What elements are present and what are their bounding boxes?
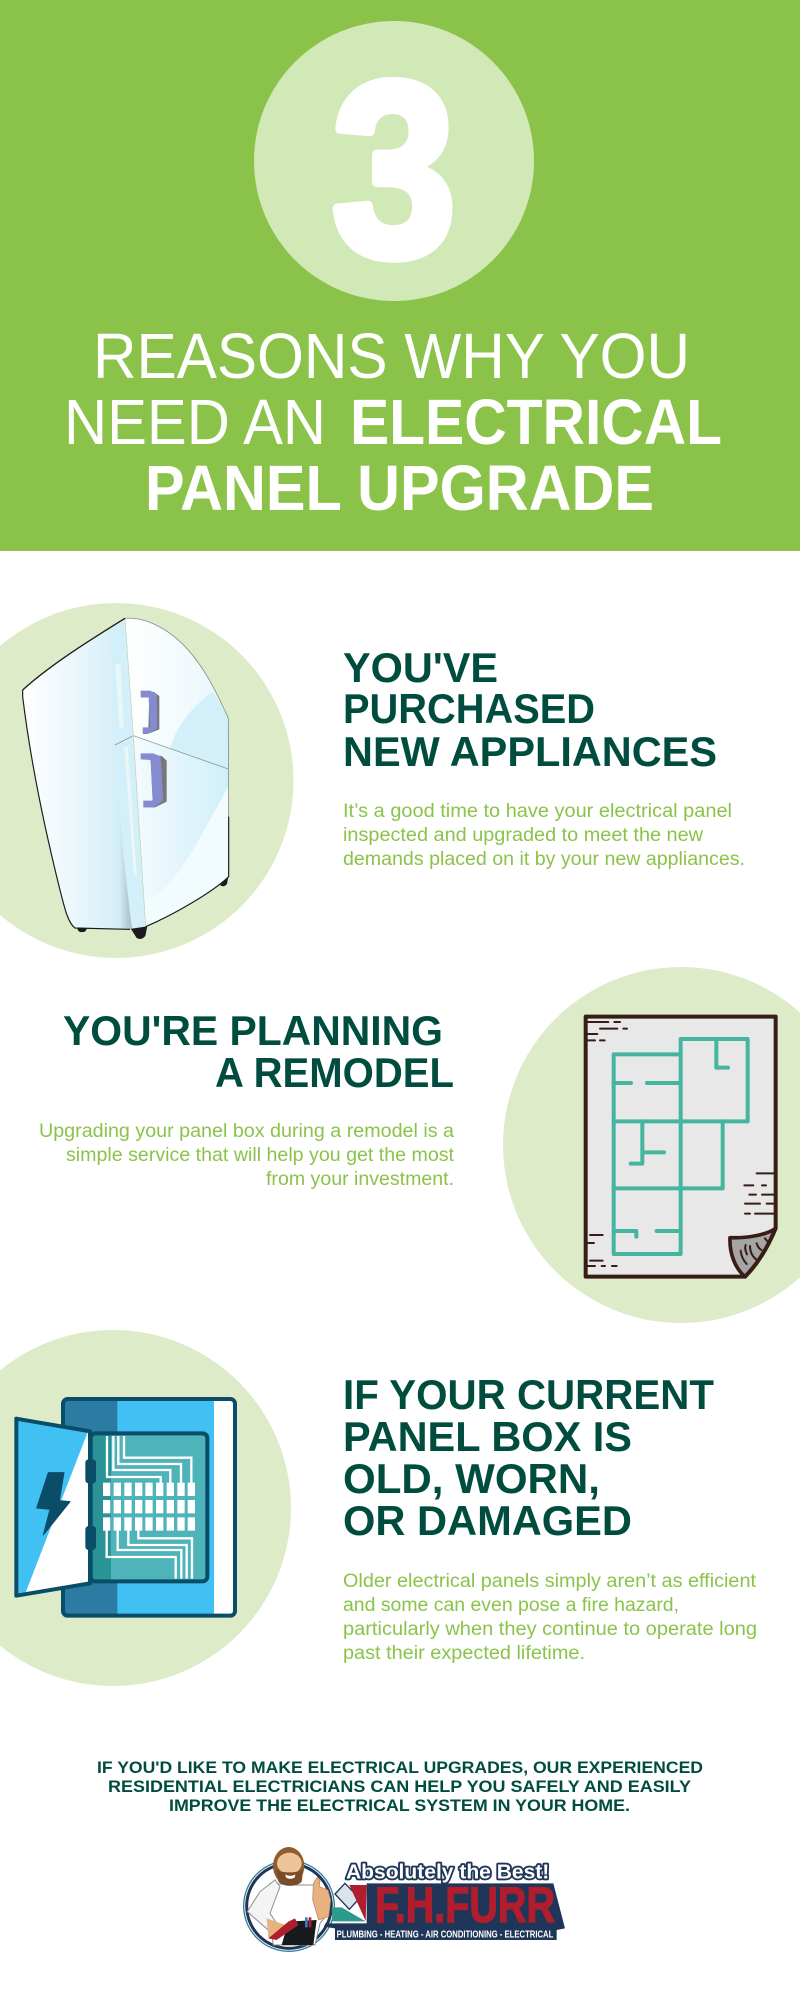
title: [64, 320, 722, 524]
panel: new appliances: [0, 603, 745, 958]
fridge handles: [141, 691, 167, 807]
body text: old worn or damaged: Older electrical panels simply aren’t as efficient: [343, 1571, 757, 1592]
body text: old worn or damaged: particularly when they continue to operate long: [343, 1619, 757, 1640]
icon circle: refrigerator background: [0, 603, 294, 958]
body text: old worn or damaged: [343, 1571, 757, 1664]
heading: purchased new appliances: YOU'VE: [343, 644, 498, 691]
body text: planning a remodel: simple service that will help you get the most: [66, 1145, 455, 1166]
body text: new appliances: inspected and upgraded to meet the new: [343, 825, 703, 846]
body text: old worn or damaged: and some can even pose a fire hazard,: [343, 1595, 679, 1616]
header banner: [0, 0, 800, 551]
heading: purchased new appliances: PURCHASED: [343, 685, 595, 732]
icon: floor plan: [586, 1017, 776, 1277]
heading: old worn or damaged: PANEL BOX IS: [343, 1413, 632, 1460]
panel: old worn or damaged: [0, 1330, 757, 1686]
closing call to action: IF YOU'D LIKE TO MAKE ELECTRICAL UPGRADES, OUR EXPERIENCED: [97, 1758, 703, 1777]
logo tagline top: Absolutely the Best!: [346, 1861, 549, 1884]
number circle: [254, 21, 534, 308]
icon: electrical panel box: [16, 1399, 235, 1616]
breaker compartment: [91, 1433, 207, 1581]
body text: planning a remodel: from your investment.: [266, 1169, 454, 1190]
title: PANEL UPGRADE: [145, 452, 654, 524]
body text: new appliances: demands placed on it by your new appliances.: [343, 849, 745, 870]
title: NEED AN: [64, 386, 326, 458]
body text: new appliances: It’s a good time to have your electrical panel: [343, 801, 732, 822]
icon: refrigerator: [23, 618, 229, 939]
heading: purchased new appliances: [343, 644, 717, 775]
logo company name: F.H.FURR: [375, 1877, 555, 1933]
heading: old worn or damaged: IF YOUR CURRENT: [343, 1371, 714, 1418]
heading: old worn or damaged: [343, 1371, 714, 1544]
heading: planning a remodel: [63, 1007, 454, 1096]
heading: old worn or damaged: OLD, WORN,: [343, 1455, 600, 1502]
icon circle: panel box background: [0, 1330, 291, 1686]
heading: purchased new appliances: NEW APPLIANCES: [343, 728, 717, 775]
heading: planning a remodel: A REMODEL: [215, 1049, 454, 1096]
panel: planning a remodel: [39, 967, 800, 1323]
icon circle: floor plan background: [503, 967, 800, 1323]
logo roof icon: [332, 1883, 367, 1921]
body text: old worn or damaged: past their expected lifetime.: [343, 1643, 585, 1664]
panel door: [16, 1419, 96, 1596]
body text: new appliances: [343, 801, 745, 870]
body text: planning a remodel: [39, 1121, 455, 1190]
heading: old worn or damaged: OR DAMAGED: [343, 1497, 632, 1544]
closing call to action: [97, 1758, 703, 1815]
logo mascot: [244, 1847, 334, 1951]
number circle: 3: [332, 30, 456, 308]
body text: planning a remodel: Upgrading your panel box during a remodel is a: [39, 1121, 454, 1142]
title: REASONS WHY YOU: [93, 320, 690, 392]
logo services strip: PLUMBING - HEATING - AIR CONDITIONING - ELECTRICAL: [337, 1929, 553, 1940]
logo: F.H. Furr: [244, 1847, 565, 1951]
closing call to action: IMPROVE THE ELECTRICAL SYSTEM IN YOUR HOME.: [169, 1796, 630, 1815]
closing call to action: RESIDENTIAL ELECTRICIANS CAN HELP YOU SAFELY AND EASILY: [108, 1777, 692, 1796]
title: ELECTRICAL: [350, 386, 722, 458]
heading: planning a remodel: YOU'RE PLANNING: [63, 1007, 443, 1054]
logo wordmark backing: [324, 1883, 565, 1940]
